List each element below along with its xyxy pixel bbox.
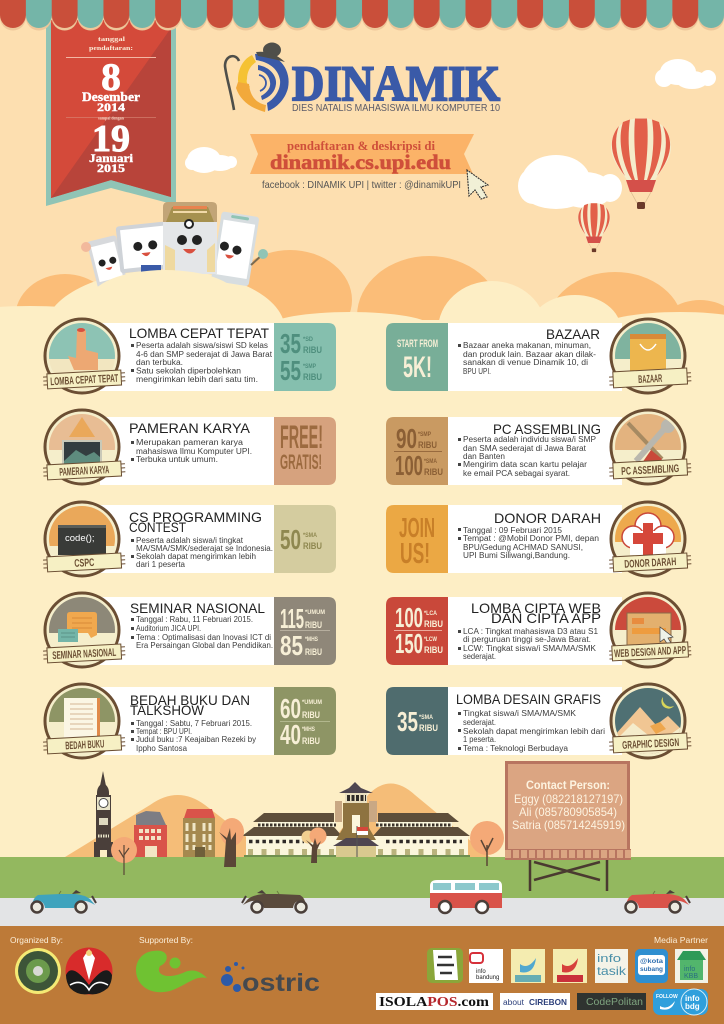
price box: 35 — [280, 328, 301, 359]
billboard: contact person: Contact Person: — [526, 778, 610, 792]
logo: info tasik: tasik — [597, 964, 627, 978]
footer: supported by: Supported By: — [139, 935, 193, 945]
logo: about cirebon: about — [503, 998, 525, 1007]
price box: *SMA — [424, 458, 437, 465]
panel: Lomba Desain Grafis — [386, 684, 692, 758]
text block: Peserta adalah individu siswa/i SMP — [463, 435, 596, 444]
logo: info bandung: bandung — [476, 975, 499, 981]
price box: 150 — [395, 628, 423, 659]
banner: registration link: pendaftaran & deskripsi di — [287, 139, 436, 153]
text block: dari 1 peserta — [136, 560, 186, 569]
text block: LOMBA DESAIN GRAFIS — [456, 691, 601, 707]
price box: *SMP — [418, 431, 432, 438]
price box: RIBU — [424, 467, 443, 478]
logo: about cirebon: CIREBON — [529, 997, 567, 1007]
icon: mouse cursor — [467, 170, 488, 199]
date ribbon: 2015 — [97, 161, 125, 175]
text block: Peserta adalah siswa/siswi SD kelas — [136, 341, 268, 350]
card background — [446, 323, 622, 391]
panel: Bazaar — [386, 319, 692, 393]
scene: green ground — [0, 857, 724, 898]
card background — [100, 505, 276, 573]
text block: TALKSHOW — [130, 702, 205, 718]
text block — [456, 691, 605, 753]
panel: Bedah Buku dan Talkshow — [43, 684, 336, 758]
date ribbon: pendaftaran: — [89, 45, 133, 52]
cloud: top right — [655, 59, 716, 89]
text block: Peserta adalah siswa/i tingkat — [136, 536, 244, 545]
text block: CONTEST — [129, 519, 186, 535]
price box: RIBU — [302, 710, 320, 721]
text block: MA/SMA/SMK/sederajat se Indonesia. — [136, 544, 273, 553]
badge: Seminar Nasional — [43, 593, 126, 667]
icon: logo mark with cane and hat — [225, 42, 289, 112]
text block: mahasiswa Ilmu Komputer UPI. — [136, 447, 252, 456]
price box: GRATIS! — [280, 451, 322, 474]
text block: CS PROGRAMMING — [129, 509, 262, 525]
text block: LOMBA CIPTA WEB — [471, 600, 601, 616]
logo: info KBB — [675, 949, 708, 983]
vehicle: red car — [626, 890, 690, 912]
date ribbon: Januari — [89, 151, 134, 165]
logo: DINAMIK — [225, 42, 500, 114]
text block: Tempat : @Mobil Donor PMI, depan — [463, 534, 599, 543]
price box — [386, 597, 448, 665]
price box — [274, 417, 336, 485]
logo: kota subang: subang — [640, 966, 663, 973]
badge: Graphic Design — [609, 684, 692, 758]
text block: BEDAH BUKU DAN — [130, 692, 250, 708]
text block: Tingkat siswa/i SMA/MA/SMK — [463, 709, 577, 718]
text block: Tanggal : Sabtu, 7 Februari 2015. — [136, 719, 252, 728]
text block: DAN CIPTA APP — [491, 610, 601, 626]
card background — [446, 417, 622, 485]
text block: Merupakan pameran karya — [136, 438, 244, 447]
text block: BPU UPI. — [463, 367, 491, 376]
badge: Bazaar — [609, 319, 692, 393]
text block: dan SMA sederajat di Jawa Barat — [463, 444, 587, 453]
logo: info tasik: info — [597, 953, 621, 965]
logo: ostric: ostric — [242, 969, 320, 997]
icon: envelope mascot — [163, 202, 217, 274]
price box: *MHS — [302, 726, 316, 733]
date ribbon: 8 — [101, 56, 121, 99]
text block — [130, 692, 256, 753]
panel: Donor Darah — [386, 502, 692, 576]
card background — [446, 687, 622, 755]
badge: CSPC — [43, 502, 126, 576]
price box: 55 — [280, 355, 301, 386]
text block — [458, 421, 601, 478]
price box: START FROM — [397, 338, 438, 350]
vehicle: teal car — [32, 890, 96, 912]
price box: RIBU — [303, 541, 322, 552]
badge: PC Assembling — [609, 410, 692, 484]
text block: sederajat. — [463, 718, 496, 727]
logo: UPI — [66, 948, 112, 994]
price box: *SMA — [303, 532, 317, 539]
logo: kota subang: @kota — [640, 958, 663, 965]
card background — [446, 505, 622, 573]
panel: Seminar Nasional — [43, 593, 336, 667]
date ribbon: tanggal — [98, 36, 125, 43]
logo: DINAMIK: DINAMIK — [292, 55, 500, 111]
price box: RIBU — [303, 345, 322, 356]
scene: red house — [134, 811, 167, 857]
footer background — [0, 926, 724, 1024]
card background — [100, 687, 276, 755]
billboard: contact person — [505, 761, 631, 891]
logo: info bandung: info — [476, 969, 486, 975]
price box: 5K! — [403, 351, 432, 384]
logo: green partner — [427, 948, 463, 983]
text block: Satu sekolah diperbolehkan — [136, 366, 241, 376]
price box: FREE! — [280, 419, 323, 455]
badge: Graphic Design: GRAPHIC DESIGN — [622, 737, 680, 752]
logo: follow info bdg: FOLLOW — [656, 994, 678, 1000]
price box — [274, 323, 336, 391]
text block: BAZAAR — [546, 326, 600, 342]
price box: JOIN — [399, 512, 435, 543]
text block: UPI Bumi Siliwangi,Bandung. — [463, 551, 570, 560]
text block: Sekolah dapat mengirimkan lebih — [136, 552, 256, 561]
price box: RIBU — [303, 372, 322, 383]
logo: twitter UPI red — [553, 949, 587, 983]
billboard: contact person: Ali (085780905854) — [519, 805, 617, 819]
badge: CSPC: code(); — [65, 533, 95, 544]
price box: *LCW — [424, 636, 438, 643]
banner: registration link — [250, 134, 474, 174]
panel: Lomba Cipta Web dan Cipta App — [386, 593, 691, 667]
price box — [274, 505, 336, 573]
logo: ostric — [221, 962, 320, 997]
scene: clock tower — [94, 771, 113, 857]
text block — [129, 325, 273, 384]
logo: about cirebon — [500, 993, 570, 1010]
price box: *SMP — [303, 363, 317, 370]
logo: info bandung — [469, 949, 503, 983]
icon: right phone mascot — [211, 211, 259, 286]
price box: RIBU — [424, 645, 443, 656]
billboard: contact person: Eggy (082218127197) — [514, 792, 623, 806]
badge: Lomba Cepat Tepat: LOMBA CEPAT TEPAT — [50, 373, 119, 388]
icon: tablet mascot — [116, 221, 170, 273]
logo: follow info bdg: bdg — [685, 1002, 700, 1011]
price box — [386, 323, 448, 391]
text block: 4-6 dan SMP sederajat di Jawa Barat — [136, 350, 273, 359]
badge: Bedah Buku — [43, 684, 126, 758]
logo: codepolitan: CodePolitan — [586, 997, 643, 1008]
scene: tan building — [183, 809, 215, 857]
price box: RIBU — [305, 647, 322, 658]
text block: 1 peserta. — [463, 735, 496, 744]
text block: Judul buku :7 Keajaiban Rezeki by — [136, 735, 256, 744]
card background — [100, 597, 276, 665]
scene: distant hills — [65, 784, 490, 857]
text block: Tanggal : 09 Februari 2015 — [463, 526, 563, 535]
logo: organizer seal — [15, 948, 61, 994]
price box: RIBU — [418, 440, 437, 451]
price box: *LCA — [424, 610, 437, 617]
footer: supported by — [136, 935, 320, 997]
badge: Lomba Cepat Tepat — [43, 319, 126, 393]
text block: dan produk lain. Bazaar akan dilak- — [463, 350, 596, 359]
date ribbon: 19 — [92, 118, 130, 160]
cloud: near banner — [185, 147, 237, 173]
price box: 100 — [395, 602, 423, 633]
footer: media partners — [376, 935, 708, 1015]
text block: dan Banten — [463, 452, 505, 461]
price box: 100 — [395, 450, 423, 481]
text block: LCW: Tingkat siswa/i SMA/MA/SMK — [463, 644, 597, 653]
text block: Ippho Santosa — [136, 744, 188, 753]
text block: SEMINAR NASIONAL — [130, 600, 265, 616]
card background — [446, 597, 622, 665]
text block: dan terbuka. — [136, 358, 183, 367]
price box: 50 — [280, 524, 301, 555]
text block: LCA : Tingkat mahasiswa D3 atau S1 — [463, 627, 599, 636]
badge: Bedah Buku: BEDAH BUKU — [65, 738, 105, 752]
cloud: centre right — [518, 155, 622, 209]
vehicle: van — [430, 880, 502, 913]
awning — [0, 0, 724, 32]
price box — [386, 505, 448, 573]
panel: CS Programming Contest — [43, 502, 336, 576]
logo: kota subang — [635, 949, 668, 983]
mascots: gadgets — [81, 202, 268, 330]
text block: LOMBA CEPAT TEPAT — [129, 325, 269, 341]
badge: Pameran Karya — [43, 410, 126, 484]
price box: 90 — [396, 423, 417, 454]
icon: small hot air balloon — [578, 203, 610, 252]
price box: *UMUM — [305, 609, 325, 616]
text block: BPU/Gedung ACHMAD SANUSI, — [463, 543, 583, 552]
price box: 85 — [280, 630, 303, 661]
price box: 60 — [280, 693, 301, 724]
price box: 40 — [280, 719, 301, 750]
price box: RIBU — [305, 620, 322, 631]
text block — [129, 420, 252, 464]
text block: ke email PCA sebagai syarat. — [463, 469, 570, 478]
text block: Terbuka untuk umum. — [136, 455, 218, 464]
price box: *UMUM — [302, 699, 322, 706]
text block: mengirimkan lebih dari satu tim. — [136, 375, 258, 384]
logo: codepolitan — [577, 993, 646, 1010]
badge: Bazaar: BAZAAR — [638, 373, 663, 386]
badge: Seminar Nasional: SEMINAR NASIONAL — [52, 647, 117, 662]
price box — [386, 417, 448, 485]
text block: Sekolah dapat mengirimkan lebih dari — [463, 727, 605, 736]
panel: Lomba Cepat Tepat — [43, 319, 336, 393]
logo: isolapos: ISOLA POS.com — [379, 995, 489, 1010]
price box: 35 — [397, 706, 418, 737]
text block — [458, 326, 600, 376]
panel: Pameran Karya — [43, 410, 336, 485]
logo: info KBB: KBB — [684, 973, 698, 980]
text block: DONOR DARAH — [494, 510, 601, 526]
text block: Mengirim data scan kartu pelajar — [463, 460, 587, 469]
scene: Gedung Sate — [242, 782, 470, 857]
price box — [386, 687, 448, 755]
price box: *SMA — [419, 714, 433, 721]
price box: 115 — [280, 603, 304, 634]
price box: RIBU — [419, 723, 438, 734]
logo: info KBB: info — [684, 966, 695, 973]
text block: sanakan di venue Dinamik 10, di — [463, 358, 588, 367]
text block — [129, 509, 273, 569]
icon: large hot air balloon — [611, 118, 671, 209]
badge: PC Assembling: PC ASSEMBLING — [621, 463, 680, 478]
date ribbon: Desember — [82, 90, 140, 104]
scene: trees — [111, 818, 504, 875]
date ribbon — [46, 20, 176, 206]
text block — [130, 600, 273, 650]
scene: road — [0, 898, 724, 926]
text block: Tema : Optimalisasi dan Inovasi ICT di — [136, 633, 271, 642]
panel: PC Assembling — [386, 410, 692, 485]
social media text: facebook : DINAMIK UPI | twitter : @dinamikUPI — [262, 179, 461, 191]
card background — [100, 417, 276, 485]
background hills — [0, 250, 724, 860]
text block: di perguruan tinggi se-Jawa Barat. — [463, 635, 591, 644]
text block: PAMERAN KARYA — [129, 420, 251, 436]
billboard: contact person: Satria (085714245919) — [512, 818, 625, 832]
text block — [458, 600, 601, 661]
text block: Auditorium JICA UPI. — [136, 624, 201, 633]
price box: *SD — [303, 336, 313, 343]
text block: Bazaar aneka makanan, minuman, — [463, 341, 591, 350]
logo: twitter UPI yellow — [511, 949, 545, 983]
text block — [458, 510, 601, 560]
text block: Tema : Teknologi Berbudaya — [463, 744, 569, 753]
text block: sederajat. — [463, 652, 496, 661]
badge: Web Design and App — [609, 593, 691, 667]
text block: Era Persaingan Global dan Pendidikan. — [136, 641, 273, 650]
badge: CSPC: CSPC — [74, 557, 95, 570]
card background — [100, 323, 276, 391]
footer: organized by — [10, 935, 112, 994]
banner: registration link: dinamik.cs.upi.edu — [270, 150, 451, 174]
vehicle: brown car — [242, 890, 306, 912]
price box — [274, 687, 336, 755]
text block: Tempat : BPU UPI. — [136, 727, 192, 736]
date ribbon: sampai dengan — [98, 116, 125, 120]
price box: RIBU — [424, 619, 443, 630]
logo: green swoosh — [136, 951, 207, 992]
price box — [274, 597, 336, 665]
logo: follow info bdg: info — [685, 994, 700, 1003]
date ribbon: 2014 — [97, 100, 125, 114]
price box: *MHS — [305, 636, 319, 643]
logo: follow info bdg — [653, 989, 708, 1015]
badge: Donor Darah: DONOR DARAH — [624, 556, 677, 571]
icon: small phone mascot — [87, 235, 127, 289]
footer: media partners: Media Partner — [654, 935, 708, 945]
logo: DINAMIK: DIES NATALIS MAHASISWA ILMU KOMPUTER 10 — [292, 103, 500, 114]
badge: Pameran Karya: PAMERAN KARYA — [59, 464, 110, 479]
badge: Donor Darah — [609, 502, 692, 576]
price box: US! — [400, 538, 430, 570]
footer: organized by: Organized By: — [10, 935, 63, 945]
text block: Tanggal : Rabu, 11 Februari 2015. — [136, 615, 253, 624]
price box: RIBU — [302, 736, 320, 747]
logo: info tasik — [595, 949, 628, 983]
text block: PC ASSEMBLING — [493, 421, 601, 437]
